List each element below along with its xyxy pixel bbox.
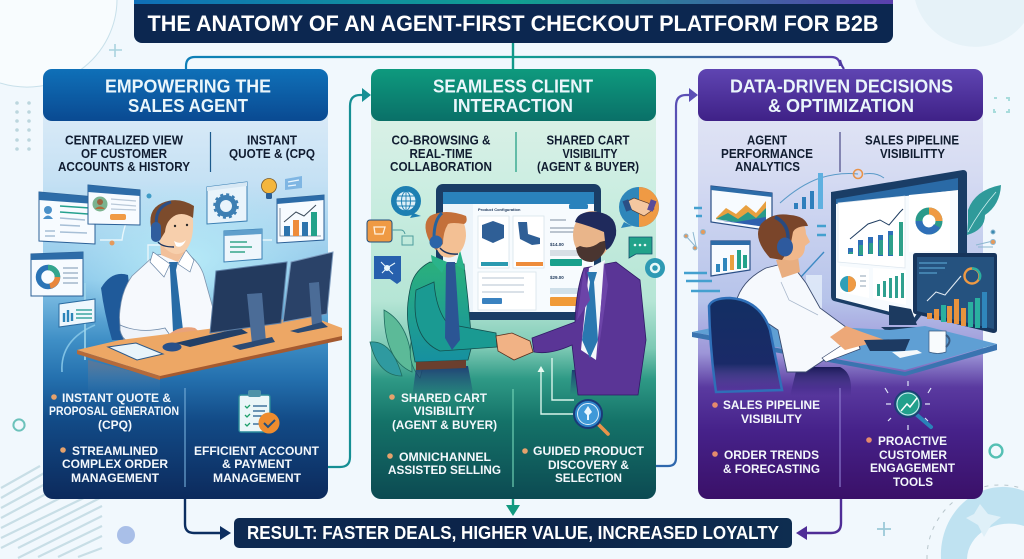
- result banner: [234, 518, 792, 548]
- text: order trends and forecasting bullet: [712, 448, 820, 476]
- icon: growth chart window: [277, 195, 324, 243]
- icon: small analytics window: [59, 299, 95, 327]
- panel 1 header: SALES AGENT: [128, 96, 248, 116]
- icon: task list window: [224, 229, 262, 262]
- decorative trend arc: [780, 174, 884, 203]
- panel: empowering the sales agent: [31, 69, 342, 499]
- icon: leaf: [967, 185, 1001, 235]
- text: agent performance analytics: AGENT: [747, 134, 787, 148]
- text: streamlined complex order management bullet: STREAMLINED: [72, 444, 158, 458]
- icon: node lines: [684, 230, 996, 250]
- text: proactive customer engagement tools bullet: PROACTIVE: [878, 434, 947, 448]
- handshake: [496, 333, 533, 360]
- panel 2 header: [371, 69, 656, 121]
- illustration: analyst at monitors: [684, 170, 1001, 396]
- panel 3 header: & OPTIMIZATION: [768, 96, 914, 116]
- text: agent performance analytics: [721, 134, 813, 174]
- text: shared cart visibility bullet: SHARED CART: [401, 391, 488, 405]
- text: sales pipeline visibility bullet: VISIBILITY: [741, 412, 802, 426]
- text: co-browsing and real-time collaboration: COLLABORATION: [390, 160, 492, 174]
- text: efficient account and payment management: & PAYMENT: [222, 457, 293, 471]
- panel 1 header: EMPOWERING THE: [105, 76, 271, 96]
- icon: gear settings window: [207, 182, 247, 224]
- text: proactive customer engagement tools bullet: ENGAGEMENT: [870, 461, 956, 475]
- text: shared cart visibility bullet: VISIBILITY: [414, 404, 474, 418]
- mouse: [162, 342, 182, 352]
- agent figure: [407, 212, 497, 398]
- text: guided product discovery bullet: DISCOVERY &: [548, 458, 629, 472]
- text: sales pipeline visibility: SALES PIPELINE: [865, 134, 959, 148]
- chair: [709, 298, 782, 392]
- icon: gear badge: [645, 258, 665, 278]
- icon: handshake bubble: [619, 187, 659, 228]
- keyboard: [175, 328, 248, 347]
- connector: title network to panels: [186, 43, 844, 69]
- text: co-browsing and real-time collaboration: [390, 134, 492, 174]
- panel 2 background: [371, 69, 656, 499]
- text: co-browsing and real-time collaboration: REAL-TIME: [410, 147, 472, 161]
- panel 2 header: SEAMLESS CLIENT: [433, 76, 593, 96]
- display with product configuration: $29.00: [550, 275, 564, 280]
- text: omnichannel assisted selling bullet: OMNICHANNEL: [399, 450, 491, 464]
- icon: product discovery magnifier: [574, 400, 608, 434]
- icon: bar chart window: [711, 241, 750, 276]
- text: omnichannel assisted selling bullet: ASSISTED SELLING: [388, 463, 501, 477]
- text: agent performance analytics: PERFORMANCE: [721, 147, 813, 161]
- text: shared cart visibility bullet: (AGENT & BUYER): [392, 418, 497, 432]
- panel: seamless client interaction: [367, 69, 665, 499]
- magnifier callout lines: [541, 358, 574, 414]
- arrow: panel 3 to result: [796, 499, 841, 540]
- arrow: panel 2 to panel 3: [656, 88, 698, 466]
- chair: [101, 274, 135, 340]
- text: proactive customer engagement tools bullet: CUSTOMER: [879, 448, 947, 462]
- text: streamlined complex order management bullet: [60, 444, 168, 485]
- text: shared cart visibility: SHARED CART: [546, 134, 630, 148]
- text: guided product discovery bullet: GUIDED PRODUCT: [533, 444, 645, 458]
- text: sales pipeline visibility bullet: SALES PIPELINE: [723, 398, 820, 412]
- left monitor: [210, 262, 287, 350]
- text: instant quote and proposal generation bullet: (CPQ): [98, 418, 132, 432]
- desk: [77, 316, 342, 396]
- icon: trend magnifier: [885, 381, 931, 430]
- big dashboard monitor: [831, 170, 967, 333]
- text: efficient account and payment management: MANAGEMENT: [213, 471, 302, 485]
- arrow: panel 1 to result: [185, 499, 231, 540]
- icon: message tag: [285, 176, 302, 190]
- icon: cart: [367, 220, 413, 245]
- text: instant quote and proposal generation bullet: [49, 391, 179, 432]
- text: efficient account and payment management: EFFICIENT ACCOUNT: [194, 444, 320, 458]
- keyboard: [864, 339, 910, 351]
- text: agent performance analytics: ANALYTICS: [735, 160, 800, 174]
- mouse: [892, 350, 922, 358]
- panel 1 header: [43, 69, 328, 121]
- text: proactive customer engagement tools bullet: [866, 434, 956, 489]
- panel 3 header: [698, 69, 983, 121]
- analyst figure: [736, 214, 885, 372]
- illustration: sales agent at desk: [31, 176, 342, 396]
- tablet: [108, 343, 163, 360]
- arrowhead: [538, 366, 544, 372]
- text: efficient account and payment management: [194, 444, 320, 485]
- text: guided product discovery bullet: [522, 444, 645, 485]
- text: co-browsing and real-time collaboration: CO-BROWSING &: [392, 134, 490, 148]
- icon: customer profile window: [39, 192, 95, 244]
- display with product configuration: [436, 184, 601, 320]
- mug: [929, 331, 950, 354]
- text: instant quote: [229, 134, 315, 161]
- panel 1 background: [43, 69, 328, 499]
- marker ring: [854, 170, 862, 178]
- title banner: [134, 0, 893, 43]
- text: sales pipeline visibility: [865, 134, 959, 161]
- arrow: panel 1 to panel 2: [328, 88, 371, 467]
- panel 2 header: INTERACTION: [453, 96, 573, 116]
- small dark monitor: [913, 253, 997, 333]
- buyer figure: [532, 211, 646, 395]
- text: sales pipeline visibility bullet: [712, 398, 820, 426]
- text: instant quote and proposal generation bullet: INSTANT QUOTE &: [62, 391, 171, 405]
- text: streamlined complex order management bullet: COMPLEX ORDER: [62, 457, 168, 471]
- text: centralized view of customer accounts: ACCOUNTS & HISTORY: [58, 160, 191, 174]
- icon: globe bubble: [391, 186, 421, 218]
- desk: [692, 322, 997, 376]
- display with product configuration: $14.00: [550, 242, 564, 247]
- result banner: RESULT: FASTER DEALS, HIGHER VALUE, INCREASED LOYALTY: [247, 523, 779, 543]
- text: proactive customer engagement tools bullet: TOOLS: [893, 475, 933, 489]
- display with product configuration: Product Configuration: [478, 207, 521, 212]
- text: shared cart visibility: [537, 134, 639, 174]
- text: shared cart visibility: (AGENT & BUYER): [537, 160, 639, 174]
- icon: donut chart window: [31, 252, 83, 296]
- text: centralized view of customer accounts: CENTRALIZED VIEW: [65, 134, 183, 148]
- title banner: THE ANATOMY OF AN AGENT-FIRST CHECKOUT PLATFORM FOR B2B: [148, 11, 878, 36]
- text: order trends and forecasting bullet: & FORECASTING: [723, 462, 820, 476]
- text: centralized view of customer accounts: OF CUSTOMER: [81, 147, 167, 161]
- text: sales pipeline visibility: VISIBILITTY: [880, 147, 946, 161]
- icon: data dashes: [684, 208, 826, 291]
- agent figure: [120, 200, 214, 342]
- trend arrow: [800, 252, 824, 278]
- text: guided product discovery bullet: SELECTION: [555, 471, 622, 485]
- rising bars: [794, 173, 823, 209]
- text: centralized view of customer accounts: [58, 134, 191, 174]
- text: omnichannel assisted selling bullet: [387, 450, 501, 477]
- icon: plant: [370, 310, 424, 378]
- arrow: panel 2 to result: [506, 499, 520, 516]
- icon: contact card window: [88, 185, 140, 225]
- text: streamlined complex order management bullet: MANAGEMENT: [71, 471, 160, 485]
- text: instant quote and proposal generation bullet: PROPOSAL GENERATION: [49, 404, 179, 418]
- icon: clipboard checklist: [239, 390, 280, 434]
- illustration: agent and buyer handshake: [367, 184, 665, 414]
- right monitor: [283, 252, 333, 333]
- seat under analyst: [790, 367, 851, 396]
- panel 3 background: [698, 69, 983, 499]
- icon: network bubble: [374, 256, 401, 284]
- text: order trends and forecasting bullet: ORDER TRENDS: [724, 448, 819, 462]
- text: shared cart visibility bullet: [389, 391, 497, 432]
- text: shared cart visibility: VISIBILITY: [562, 147, 618, 161]
- panel: data-driven decisions: [684, 69, 1001, 499]
- icon: light bulb: [262, 178, 276, 199]
- text: instant quote: INSTANT: [247, 134, 297, 148]
- icon: chat bubble: [629, 237, 652, 258]
- text: instant quote: QUOTE & (CPQ: [229, 147, 315, 161]
- panel 3 header: DATA-DRIVEN DECISIONS: [730, 76, 953, 96]
- icon: area chart window: [711, 186, 772, 231]
